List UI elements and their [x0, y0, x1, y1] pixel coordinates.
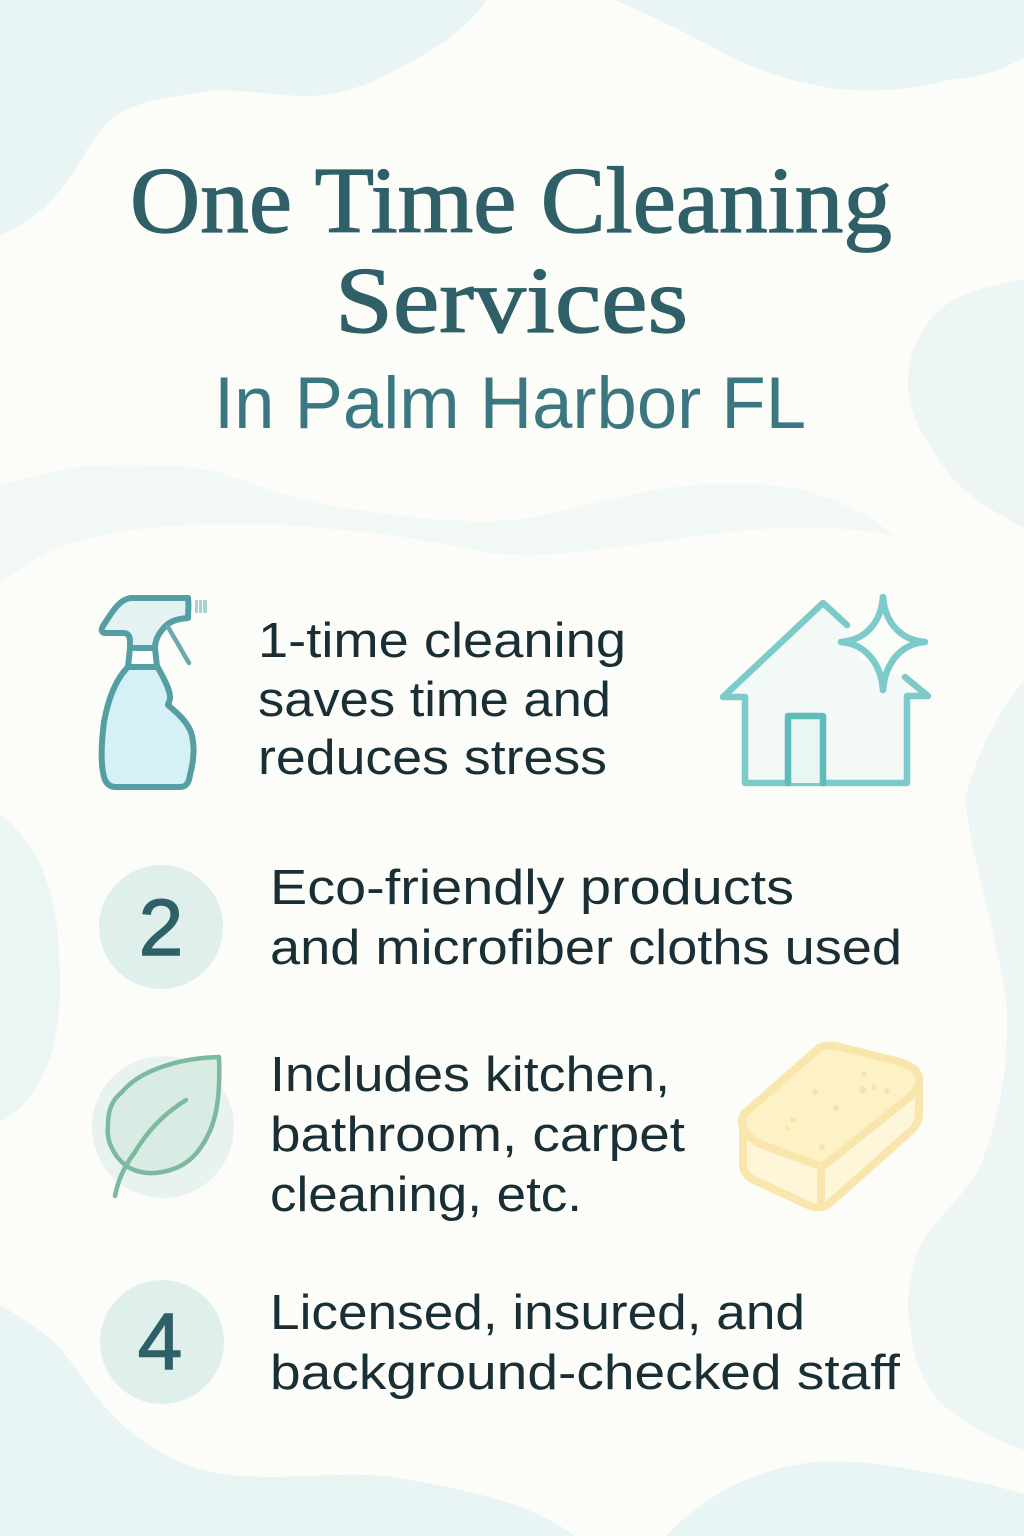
text: item 2: and microfiber cloths used — [270, 921, 902, 975]
text: item 4: background-checked staff — [270, 1346, 900, 1400]
text: item 4 — [270, 1286, 900, 1400]
text: item 1: 1-time cleaning — [258, 614, 626, 668]
title — [130, 149, 892, 353]
text: item 1: reduces stress — [258, 731, 607, 785]
title: One Time Cleaning — [130, 149, 892, 253]
number badge 2: 2 — [139, 883, 183, 972]
number badge 2 — [99, 865, 223, 989]
icon: house with sparkle — [723, 597, 928, 783]
number badge 4 — [100, 1280, 224, 1404]
text: item 3 — [270, 1048, 685, 1222]
icon: leaf — [92, 1056, 234, 1198]
subtitle: In Palm Harbor FL — [214, 363, 806, 444]
title: Services — [335, 249, 688, 353]
text: item 1: saves time and — [258, 673, 611, 727]
text: item 1 — [258, 614, 626, 785]
number badge 4: 4 — [138, 1297, 182, 1386]
icon: spray bottle — [102, 598, 207, 787]
text: item 3: cleaning, etc. — [270, 1168, 582, 1222]
text: item 3: bathroom, carpet — [270, 1108, 685, 1162]
text: item 2 — [270, 861, 902, 975]
text: item 3: Includes kitchen, — [270, 1048, 670, 1102]
icon: sponge — [742, 1046, 919, 1207]
text: item 2: Eco-friendly products — [270, 861, 794, 915]
text: item 4: Licensed, insured, and — [270, 1286, 805, 1340]
